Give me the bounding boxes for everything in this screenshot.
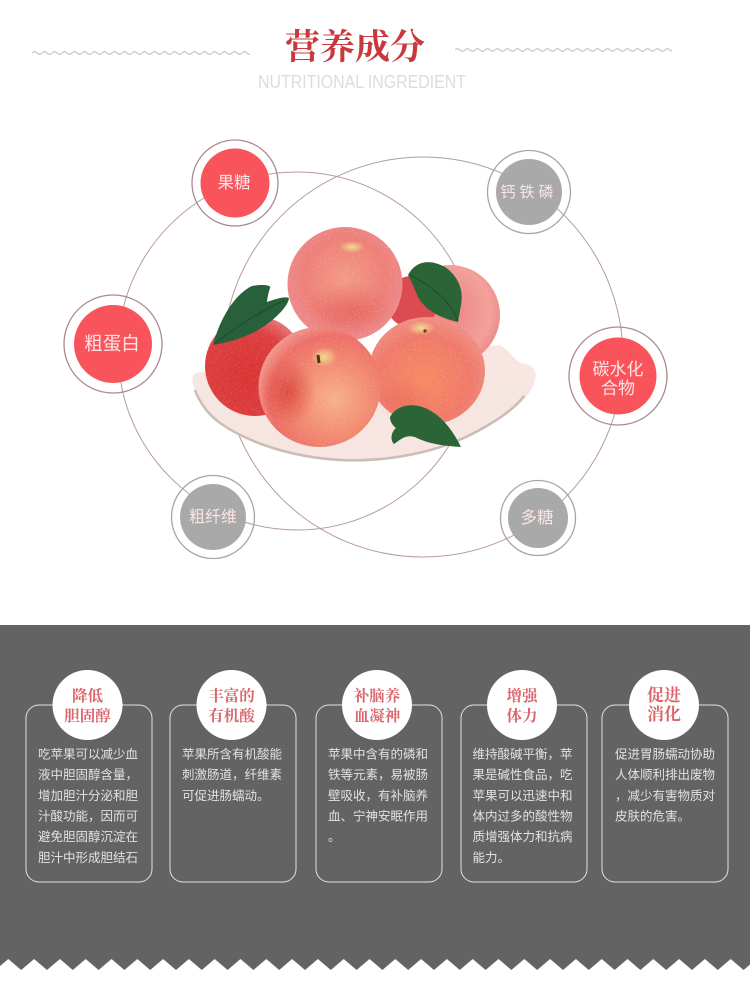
- card: organic acids: 苹果所含有机酸能: [182, 746, 283, 762]
- node: polysaccharide: 多糖: [520, 508, 554, 527]
- node: calcium iron phosphorus: [488, 150, 570, 234]
- node: carbohydrate: [569, 327, 667, 425]
- card: lowers cholesterol: 胆固醇: [64, 706, 111, 725]
- card: organic acids: [170, 670, 296, 882]
- card: lowers cholesterol: 增加胆汁分泌和胆: [38, 788, 138, 803]
- orbit arcs: [118, 157, 623, 557]
- band background: [0, 625, 750, 970]
- node: polysaccharide: [500, 480, 576, 556]
- plate rim: [195, 390, 524, 460]
- node: fructose: 果糖: [218, 173, 250, 192]
- card: digestion: 促进: [647, 686, 681, 705]
- decorative wavy line left: [32, 47, 250, 59]
- node: fructose: [192, 140, 278, 226]
- leaf: back: [408, 262, 462, 322]
- card: lowers cholesterol: 吃苹果可以减少血: [38, 748, 138, 762]
- node: crude protein: [64, 295, 162, 393]
- apple: front right: [369, 317, 485, 425]
- node: carbohydrate: 合物: [601, 379, 635, 398]
- card: brain and blood: 。: [328, 830, 341, 844]
- panel: benefits band: [0, 625, 750, 970]
- leaf: left: [213, 285, 289, 345]
- plate: [192, 345, 536, 461]
- card: brain and blood: 苹果中含有的磷和: [328, 746, 428, 762]
- card: organic acids: 可促进肠蠕动。: [182, 789, 270, 803]
- diagram: nutrient orbit: [64, 140, 667, 558]
- node: crude fibre: 粗纤维: [189, 508, 237, 526]
- decorative wavy line right: [455, 44, 672, 56]
- card: brain and blood: 铁等元素，易被肠: [328, 767, 428, 782]
- node: calcium iron phosphorus: 钙铁磷: [500, 184, 558, 201]
- card: organic acids: 刺激肠道，纤维素: [182, 768, 282, 782]
- apple: top: [288, 227, 402, 341]
- node: crude fibre: [172, 476, 254, 558]
- card: brain and blood: 血凝神: [354, 706, 401, 725]
- card: lowers cholesterol: 液中胆固醇含量，: [38, 767, 138, 782]
- card: organic acids: 有机酸: [208, 706, 256, 725]
- card: digestion: 皮肤的危害。: [615, 808, 690, 824]
- card: stamina: 增强: [506, 687, 539, 705]
- apple: left: [205, 316, 305, 416]
- card: lowers cholesterol: [26, 670, 152, 882]
- zigzag edge: [0, 959, 750, 970]
- card: stamina: 苹果可以迅速中和: [472, 788, 573, 803]
- card: stamina: 体内过多的酸性物: [472, 808, 573, 824]
- card: brain and blood: [316, 670, 442, 882]
- card: stamina: [461, 670, 587, 882]
- apple: small red behind: [386, 276, 438, 328]
- card: digestion: [602, 670, 728, 882]
- card: stamina: 维持酸碱平衡，苹: [472, 746, 573, 762]
- card: organic acids: 丰富的: [208, 686, 255, 705]
- card: lowers cholesterol: 降低: [72, 686, 103, 705]
- subtitle: NUTRITIONAL INGREDIENT: [258, 72, 466, 92]
- apple: front left: [258, 327, 380, 447]
- apple: back right: [400, 265, 500, 365]
- title: 营养成分: [285, 28, 425, 67]
- card: stamina: 质增强体力和抗病: [472, 829, 573, 844]
- card: brain and blood: 血、宁神安眠作用: [328, 808, 428, 824]
- card: brain and blood: 壁吸收，有补脑养: [328, 788, 428, 803]
- illustration: apples on a plate: [192, 227, 536, 461]
- card: stamina: 体力: [506, 707, 538, 725]
- card: lowers cholesterol: 避免胆固醇沉淀在: [38, 829, 138, 844]
- card: digestion: 人体顺利排出废物: [615, 767, 715, 782]
- leaf: front: [390, 405, 461, 447]
- card: brain and blood: 补脑养: [354, 686, 401, 705]
- card: lowers cholesterol: 胆汁中形成胆结石: [38, 850, 138, 865]
- card: digestion: 消化: [647, 704, 681, 724]
- card: lowers cholesterol: 汁酸功能，因而可: [38, 808, 138, 824]
- card: stamina: 能力。: [472, 851, 510, 865]
- card: stamina: 果是碱性食品，吃: [472, 767, 573, 782]
- card: digestion: ，减少有害物质对: [615, 788, 715, 803]
- node: crude protein: 粗蛋白: [84, 333, 140, 354]
- node: carbohydrate: 碳水化: [592, 360, 644, 379]
- card: digestion: 促进胃肠蠕动协助: [615, 746, 715, 762]
